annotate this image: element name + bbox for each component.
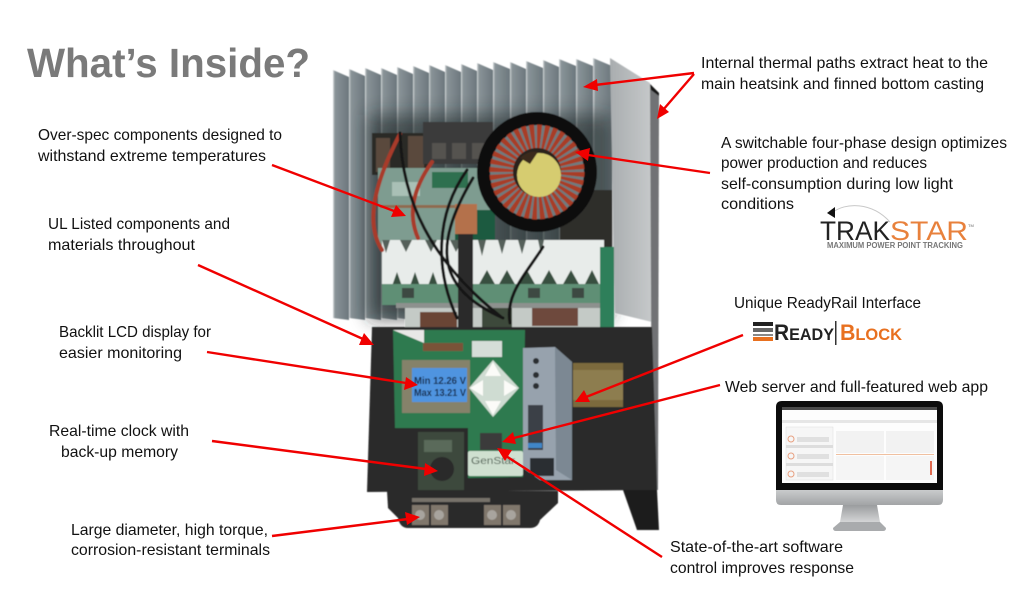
text: UL listed: materials throughout — [48, 237, 196, 254]
lower power board — [382, 247, 614, 327]
LCD display: Max 13.21 V — [414, 387, 466, 399]
GenStar label — [468, 451, 523, 476]
text: backlit LCD: Backlit LCD display for — [59, 324, 212, 341]
lower enclosure — [367, 327, 657, 492]
logo: TrakStar: STAR — [890, 216, 968, 246]
text: over-spec components — [37, 127, 282, 165]
red callout arrows — [198, 73, 743, 557]
arrow: software control — [497, 448, 662, 557]
text: web server: Web server and full-featured web app — [725, 379, 988, 396]
toroid inductor — [477, 112, 597, 232]
text: real-time clock: Real-time clock with — [49, 423, 189, 440]
product photo: charge controller — [333, 58, 659, 530]
logo: ReadyBlock: READY — [774, 320, 835, 345]
text: four-phase design: self-consumption during low light — [721, 176, 954, 193]
text: thermal paths — [701, 55, 988, 93]
arrow: thermal paths to casting — [657, 74, 694, 119]
chip — [480, 433, 502, 450]
text: over-spec components: Over-spec components designed to — [38, 127, 282, 144]
interior shadow — [368, 115, 612, 320]
text: ReadyRail interface: Unique ReadyRail Interface — [734, 295, 921, 312]
mounting bracket — [623, 490, 659, 530]
real-time clock board — [418, 432, 464, 490]
text: terminals: corrosion-resistant terminals — [71, 542, 270, 559]
logo: TrakStar — [820, 206, 974, 250]
side panel and edge — [610, 58, 659, 490]
arrow: four-phase design — [575, 148, 710, 173]
text: thermal paths: main heatsink and finned bottom casting — [701, 76, 984, 93]
text: four-phase design — [721, 135, 1007, 213]
arrow: backlit LCD — [207, 352, 418, 390]
title: What’s Inside? — [27, 40, 310, 86]
arrow: terminals — [272, 512, 420, 536]
text: software control: control improves response — [670, 560, 854, 577]
text: thermal paths: Internal thermal paths extract heat to the — [701, 55, 988, 72]
copper busbar and thick cable — [455, 204, 477, 327]
GenStar label: GenStar — [471, 456, 516, 467]
circuit board — [378, 168, 495, 246]
keypad — [469, 360, 519, 417]
text: four-phase design: conditions — [721, 196, 794, 213]
LCD display: Min 12.26 V — [414, 375, 466, 387]
transformer — [573, 363, 623, 407]
text: terminals: Large diameter, high torque, — [71, 522, 268, 539]
logo: ReadyBlock: BLOCK — [840, 320, 903, 345]
heat block — [423, 122, 493, 164]
text: four-phase design: A switchable four-phase design optimizes — [721, 135, 1007, 152]
text: four-phase design: power production and reduces — [721, 155, 927, 172]
text: UL listed — [48, 216, 230, 254]
logo: TrakStar: TM — [968, 223, 974, 228]
arrow: over-spec components — [272, 165, 406, 217]
web app screenshot — [782, 407, 937, 480]
LCD display — [402, 360, 470, 413]
relay rail module — [523, 347, 572, 480]
arrow: UL listed components — [198, 265, 374, 345]
arrow: thermal paths to heatsink — [583, 73, 694, 91]
capacitors — [405, 308, 600, 328]
text: UL listed: UL Listed components and — [48, 216, 230, 233]
logo: TrakStar: MAXIMUM POWER POINT TRACKING — [827, 241, 963, 250]
text: software control: State-of-the-art software — [670, 539, 843, 556]
text: real-time clock — [49, 423, 189, 461]
terminal block — [387, 491, 558, 528]
inductors — [372, 133, 430, 175]
text: over-spec components: withstand extreme temperatures — [37, 148, 266, 165]
green display board — [393, 330, 525, 478]
arrow: web server — [502, 385, 720, 444]
right dark block — [560, 190, 612, 250]
logo: ReadyBlock — [753, 320, 903, 345]
text: terminals — [71, 522, 270, 559]
cables — [373, 133, 543, 323]
text: software control — [670, 539, 854, 577]
icon: monitor showing web app — [776, 401, 943, 531]
arrow: ReadyRail interface — [575, 335, 743, 402]
arrow: real-time clock — [212, 441, 438, 476]
logo: TrakStar: TRAK — [820, 216, 890, 246]
text: backlit LCD — [59, 324, 212, 362]
text: backlit LCD: easier monitoring — [59, 345, 182, 362]
white heatsink — [382, 240, 604, 286]
heatsink fins — [333, 58, 612, 320]
text: real-time clock: back-up memory — [61, 444, 178, 461]
